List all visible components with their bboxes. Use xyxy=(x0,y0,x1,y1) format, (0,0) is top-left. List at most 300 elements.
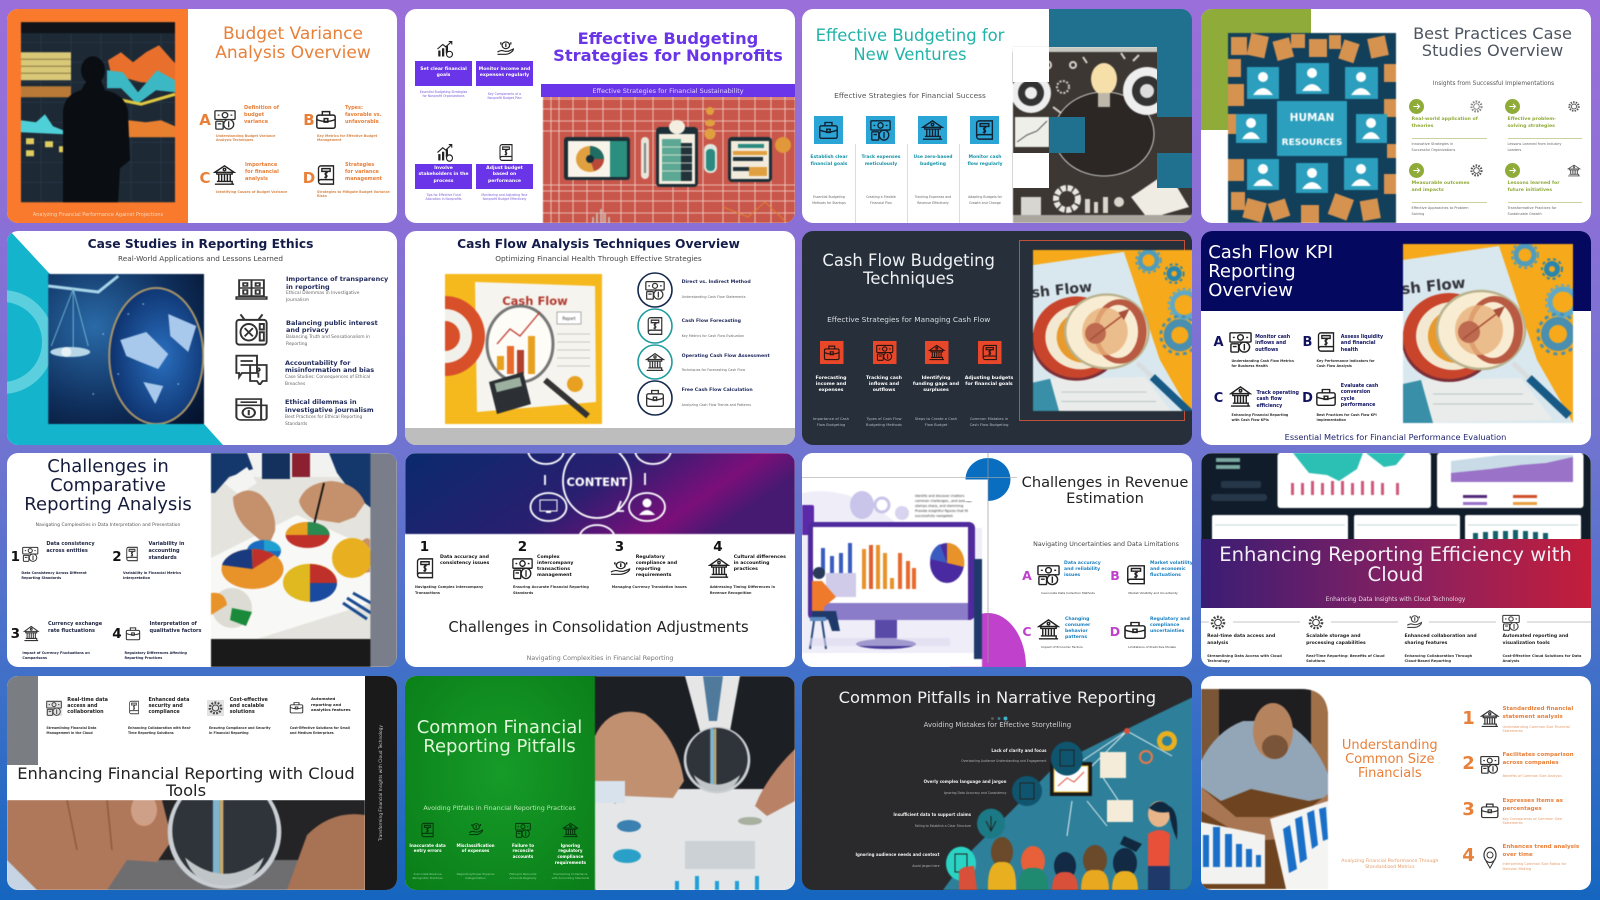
point: performance xyxy=(1341,403,1375,408)
note: Real-Time Reporting: Benefits of Cloud xyxy=(1306,654,1385,658)
white notch xyxy=(1013,152,1049,188)
label xyxy=(486,166,523,184)
point C: analysis xyxy=(245,176,268,182)
label: surpluses xyxy=(923,388,949,393)
icon: briefcase xyxy=(1314,387,1336,407)
arrow badge xyxy=(1505,98,1520,114)
image: cash flow report with magnifier xyxy=(445,274,602,424)
note: Key Components of a xyxy=(488,92,521,96)
number 1: 1 xyxy=(1462,708,1475,729)
note: Standards xyxy=(513,591,533,595)
title xyxy=(1413,25,1572,59)
point xyxy=(1502,751,1574,767)
image: human resources blocks xyxy=(1228,32,1396,222)
point xyxy=(286,320,378,335)
point: efficiency xyxy=(1256,404,1282,409)
banner image: content cycle: CONTENT xyxy=(566,475,628,489)
note: Enhancing Collaboration Through xyxy=(1404,654,1472,658)
box: goals xyxy=(415,60,472,86)
note xyxy=(1306,654,1385,663)
label: requirements xyxy=(555,860,586,865)
point: across entities xyxy=(46,548,88,554)
point xyxy=(734,555,786,573)
label: expenses regularly xyxy=(480,73,529,78)
point xyxy=(148,541,184,562)
point C: for financial xyxy=(245,168,279,174)
note D xyxy=(317,190,390,198)
note: Data Consistency Across Different xyxy=(21,570,87,574)
number 4: 4 xyxy=(713,539,723,555)
label: inflows and xyxy=(869,382,899,387)
icon: bank xyxy=(1228,385,1252,408)
icon: ledger xyxy=(318,165,334,185)
icon: chart grid xyxy=(46,700,62,716)
note xyxy=(1207,654,1282,663)
note: Streamlining Financial Data xyxy=(46,726,96,730)
point: reporting xyxy=(636,567,661,572)
note: Key Performance Indicators for xyxy=(1316,358,1375,362)
note: Effective Approaches to Problem xyxy=(1412,206,1469,210)
note xyxy=(22,650,90,660)
point: Regulatory xyxy=(636,555,665,560)
point: compliance xyxy=(1150,623,1179,628)
note xyxy=(1502,654,1581,663)
icon: laptop xyxy=(235,278,268,302)
label xyxy=(1412,117,1478,131)
note: Key Metrics for Cash Flow Evaluation xyxy=(682,334,744,338)
label: meticulously xyxy=(865,162,897,167)
note xyxy=(124,650,187,660)
panel: Common Pitfalls in Narrative Reporting xyxy=(802,676,1192,890)
panel: Cash Flow Budgeting Techniques xyxy=(802,231,1192,445)
point xyxy=(1150,561,1193,579)
point: Importance of transparency xyxy=(286,275,388,283)
panel: Challenges in Consolidation Adjustments xyxy=(405,453,795,667)
point: Real-time data access and xyxy=(1207,634,1275,639)
note xyxy=(866,416,902,428)
point: analytics features xyxy=(311,707,351,712)
subtitle: Effective Strategies for Financial Sustainability xyxy=(592,86,744,94)
icon tile: ledger xyxy=(970,116,999,144)
icon: chess pieces xyxy=(1566,164,1580,176)
label: process xyxy=(433,179,454,184)
note: Benefits of Common Size Analysis xyxy=(1502,774,1562,778)
icon: growth xyxy=(437,41,454,58)
note B: Management xyxy=(317,138,341,142)
icon: bank xyxy=(22,625,39,642)
point: Assess liquidity xyxy=(1341,335,1383,340)
point: Accountability for xyxy=(285,359,350,367)
icon: cash xyxy=(1228,331,1252,353)
rule xyxy=(1412,202,1582,203)
ring icon: ledger xyxy=(636,308,672,344)
note xyxy=(286,290,359,304)
ring icon: cash xyxy=(636,272,672,308)
title xyxy=(1208,243,1333,300)
note xyxy=(552,872,589,880)
label: Set clear financial xyxy=(420,67,467,72)
image: scales and globe xyxy=(48,274,204,424)
label xyxy=(1508,181,1560,195)
point: Standardized financial xyxy=(1502,706,1573,712)
box: adjust xyxy=(476,164,533,189)
point D: for variance xyxy=(345,168,379,174)
point: intercompany xyxy=(537,561,573,566)
note: Standards xyxy=(285,422,307,426)
icon: briefcase xyxy=(289,701,304,714)
title: Challenges in xyxy=(47,456,169,477)
point: access and xyxy=(67,703,98,709)
note: Avoid jargon here xyxy=(912,864,940,868)
note xyxy=(813,416,849,428)
note xyxy=(1232,412,1288,422)
point: Direct vs. Indirect Method xyxy=(682,280,751,285)
icon tile: ledger xyxy=(978,341,1001,364)
image: human resources blocks: RESOURCES xyxy=(1281,138,1342,148)
label: Forecasting xyxy=(816,376,846,380)
point: uncertainties xyxy=(1150,629,1184,634)
label xyxy=(1508,117,1556,131)
note: Neglecting Proper Expense xyxy=(457,872,494,876)
letter B: B xyxy=(1110,568,1120,583)
point: security and xyxy=(148,703,183,709)
point xyxy=(1065,617,1090,641)
label xyxy=(479,66,530,78)
teal block lower right xyxy=(1157,152,1193,188)
point xyxy=(285,399,374,414)
point: Enhanced collaboration and xyxy=(1404,634,1477,639)
point: in reporting xyxy=(286,283,330,291)
note xyxy=(1502,725,1570,734)
icon: briefcase xyxy=(1123,620,1147,640)
icon: delivery xyxy=(1404,614,1422,631)
note xyxy=(970,416,1008,428)
image: analytics dashboard xyxy=(1200,453,1590,540)
title xyxy=(215,24,371,62)
note D: Strategies to Mitigate Budget Variance xyxy=(317,190,390,194)
title xyxy=(24,458,192,514)
subtitle: Real-World Applications and Lessons Learned xyxy=(118,254,283,262)
subtitle: Enhancing Data Insights with Cloud Technology xyxy=(1326,597,1465,603)
point: Free Cash Flow Calculation xyxy=(682,388,753,393)
label: Use zero-based xyxy=(913,155,953,160)
connector lines xyxy=(1200,621,1590,623)
note xyxy=(21,570,87,580)
note: Statements xyxy=(1502,729,1523,733)
note: Allocation in Nonprofits xyxy=(425,197,462,201)
point: consumer xyxy=(1065,623,1090,628)
subtitle: Optimizing Financial Health Through Effective Strategies xyxy=(495,254,702,262)
title: Cloud xyxy=(1368,563,1423,586)
number 4: 4 xyxy=(1462,845,1475,866)
white notch xyxy=(1013,46,1049,82)
note xyxy=(481,192,528,201)
title: Budget Variance xyxy=(223,24,363,44)
note: Flow Budget xyxy=(925,423,947,427)
note xyxy=(1412,141,1455,153)
label: regulatory xyxy=(558,848,583,853)
note: Decision Making xyxy=(1502,867,1531,871)
title xyxy=(417,719,582,756)
image: hands over pie charts xyxy=(211,453,397,667)
icon: ledger xyxy=(128,700,140,715)
magenta circle xyxy=(950,613,1030,667)
point: patterns xyxy=(1065,635,1087,640)
icon: map pin coin xyxy=(1482,847,1496,869)
note A: Analysis Techniques xyxy=(216,138,253,142)
point: requirements xyxy=(636,573,671,578)
point: fluctuations xyxy=(1150,573,1181,578)
note: Market Volatility and Uncertainty xyxy=(1128,591,1178,595)
box: stakeholders xyxy=(415,164,472,189)
note: and Medium Enterprises xyxy=(290,731,334,735)
icon tile: cash xyxy=(866,116,895,144)
title: Reporting Pitfalls xyxy=(423,736,576,757)
point: Monitor cash xyxy=(1255,335,1290,340)
label xyxy=(913,154,953,167)
note: Navigating Complex Intercompany xyxy=(415,585,483,589)
point: issues xyxy=(1064,573,1080,578)
label: income and xyxy=(816,382,846,387)
label xyxy=(418,166,469,184)
point: misinformation and bias xyxy=(285,366,374,374)
illustration: teal network and audience xyxy=(802,676,1193,890)
title: Effective Budgeting xyxy=(578,29,758,48)
point: in accounting xyxy=(734,561,769,566)
subtitle xyxy=(1341,859,1438,871)
title: Estimation xyxy=(1066,490,1144,507)
note xyxy=(866,194,896,204)
point: Track operating xyxy=(1256,391,1299,396)
subtitle band xyxy=(541,84,795,97)
panel: Challenges in Comparative Reporting Analysis xyxy=(7,453,397,667)
note: Overlooking Compliance xyxy=(553,872,588,876)
note: for Nonprofit Organizations xyxy=(422,94,464,98)
label: accounts xyxy=(513,854,533,859)
letter D: D xyxy=(1302,391,1313,406)
note xyxy=(285,374,370,388)
note B: Key Metrics for Effective Budget xyxy=(317,134,377,138)
note: Interpretation xyxy=(123,576,150,580)
note xyxy=(285,414,362,428)
note xyxy=(123,570,181,580)
point xyxy=(48,621,102,635)
note: Budgeting Methods xyxy=(866,423,902,427)
note B xyxy=(317,134,378,142)
note: Reporting Standards xyxy=(21,576,61,580)
note: Statements xyxy=(1502,821,1523,825)
icon: chip xyxy=(1208,614,1226,631)
point: Complex xyxy=(537,555,560,560)
icon tile: briefcase xyxy=(820,341,844,364)
note: Creating a Flexible xyxy=(866,194,896,198)
note xyxy=(513,585,589,596)
label: financial goals xyxy=(811,162,847,167)
label: Adjust budget xyxy=(486,166,523,171)
point D: Strategies xyxy=(345,162,374,168)
point xyxy=(1207,634,1275,647)
title xyxy=(553,29,783,65)
note: Sustainable Growth xyxy=(1508,212,1542,216)
point: Enhanced data xyxy=(148,697,189,703)
note: Categorization xyxy=(465,876,486,880)
point: Insufficient data to support claims xyxy=(893,812,971,817)
title: Case Studies in Reporting Ethics xyxy=(88,237,313,251)
note A xyxy=(216,134,276,142)
icon: coin in hand xyxy=(497,41,514,55)
illustration: analysts at monitor: Identify and discover chatters xyxy=(915,494,964,498)
icon: cash xyxy=(1480,755,1499,774)
label: compliance xyxy=(557,854,583,859)
note: Solving xyxy=(1412,212,1424,216)
note: Financial Plan xyxy=(870,200,892,204)
point: Cultural differences xyxy=(734,555,786,560)
green block xyxy=(1200,8,1310,130)
label: Tracking cash xyxy=(866,376,902,380)
point: Data consistency xyxy=(46,541,95,547)
point: and privacy xyxy=(286,326,329,334)
note xyxy=(1232,358,1294,368)
icon: briefcase xyxy=(316,110,336,129)
note: Lessons Learned from Industry xyxy=(1508,142,1561,146)
footer line: Essential Metrics for Financial Performance Evaluation xyxy=(1285,432,1506,442)
navy header xyxy=(1200,231,1590,311)
icon: umbrella coins xyxy=(562,822,579,838)
note: Recognition Practices xyxy=(413,876,443,880)
point: accounting xyxy=(148,548,180,554)
ring icon: bank xyxy=(636,344,672,380)
dark side column xyxy=(365,676,397,890)
note: Ensuring Compliance and Security xyxy=(209,726,271,730)
panel: Understanding Common Size Financials xyxy=(1200,676,1590,890)
letter B: B xyxy=(303,110,315,128)
note: Case Studies: Consequences of Ethical xyxy=(285,374,370,380)
letter D: D xyxy=(303,168,315,186)
note: Management in the Cloud xyxy=(46,731,93,735)
image: inspecting documents with magnifier xyxy=(595,676,795,890)
ring icon: briefcase xyxy=(636,380,672,416)
icon: speech bubbles xyxy=(235,353,268,385)
title xyxy=(1219,544,1572,586)
arrow badge xyxy=(1505,162,1520,178)
icon: cash xyxy=(512,557,533,579)
note: with Cash Flow KPIs xyxy=(1232,418,1269,422)
number 2: 2 xyxy=(518,539,527,555)
note xyxy=(457,872,494,880)
note: Managing Currency Translation Issues xyxy=(612,585,687,589)
point: investigative journalism xyxy=(285,406,374,414)
note: Enhancing Financial Reporting xyxy=(1232,412,1288,416)
title: Challenges in Revenue xyxy=(1022,474,1188,491)
point: Ignoring audience needs and context xyxy=(855,852,940,857)
image: man reviewing printed charts xyxy=(1201,688,1329,890)
icon: ledger xyxy=(1125,564,1147,586)
point: Automated xyxy=(311,696,335,701)
arrow badge xyxy=(1408,98,1424,114)
note: Steps to Create a Cash xyxy=(915,417,957,421)
title: Challenges in Consolidation Adjustments xyxy=(448,619,749,636)
note: Techniques for Forecasting Cash Flow xyxy=(682,368,745,372)
point: Balancing public interest xyxy=(286,319,378,327)
icon: growth xyxy=(437,144,454,162)
image: target under magnifier xyxy=(1032,250,1194,411)
title: Strategies for Nonprofits xyxy=(553,46,783,65)
note xyxy=(510,872,536,880)
note xyxy=(487,92,522,100)
point: sharing features xyxy=(1404,640,1447,646)
letter A: A xyxy=(1213,335,1224,350)
point xyxy=(1150,617,1190,635)
teal block centre xyxy=(1049,116,1085,152)
letter C: C xyxy=(1214,391,1223,406)
image: analyst viewing financial charts xyxy=(20,21,176,204)
panel: Cash Flow KPI Reporting Overview xyxy=(1200,231,1590,445)
label: Failure to xyxy=(512,843,534,848)
point xyxy=(1064,561,1101,579)
image: red grid with finance devices xyxy=(542,97,795,223)
panel: Common Financial Reporting Pitfalls xyxy=(405,676,795,890)
label xyxy=(967,154,1003,167)
note: Leaders xyxy=(1508,148,1521,152)
teal block top xyxy=(1049,8,1193,46)
icon tile: bank xyxy=(918,116,947,144)
image: light bulb and icons xyxy=(1012,46,1192,223)
point A xyxy=(244,105,279,125)
label: expenses xyxy=(819,388,843,393)
icon tile: briefcase xyxy=(814,116,843,144)
point xyxy=(1256,391,1299,410)
label: Ignoring xyxy=(561,843,580,848)
point: Expresses Items as xyxy=(1502,798,1563,804)
note: Cash Flow Analysis xyxy=(1316,364,1352,368)
note xyxy=(1508,204,1556,217)
note: Understanding Common Size Financial xyxy=(1502,725,1570,729)
letter A: A xyxy=(1022,568,1032,583)
subtitle: Analyzing Financial Performance Through xyxy=(1341,859,1438,864)
label: Measurable outcomes xyxy=(1412,181,1470,186)
title xyxy=(816,26,1004,64)
blue circle xyxy=(965,458,1011,501)
label xyxy=(512,843,534,860)
note: Streamlining Data Access with Cloud xyxy=(1207,654,1282,658)
image: human resources blocks: HUMAN xyxy=(1289,112,1334,124)
icon: cloud network xyxy=(1306,614,1324,631)
illustration: analysts at monitor: common challenges...and average xyxy=(915,499,972,503)
icon: chart grid xyxy=(1502,614,1520,631)
point: Market volatility xyxy=(1150,561,1192,566)
point: Automated reporting and xyxy=(1502,634,1568,639)
point: management xyxy=(537,573,572,578)
point: cash flow xyxy=(1256,397,1282,402)
point xyxy=(537,555,573,579)
point: Lack of clarity and focus xyxy=(991,748,1046,753)
icon tile: bank xyxy=(925,341,948,364)
note xyxy=(1412,204,1469,217)
icon: cash xyxy=(1037,564,1060,586)
title: Cash Flow KPI xyxy=(1208,242,1333,263)
note xyxy=(1502,817,1562,825)
label: and impacts xyxy=(1412,188,1444,193)
image: hand with magnifying lens xyxy=(7,800,365,890)
label: theories xyxy=(1412,124,1433,129)
letter D: D xyxy=(1110,624,1120,639)
title: Common Pitfalls in Narrative Reporting xyxy=(839,688,1156,707)
subtitle: Standardized Metrics xyxy=(1365,865,1415,870)
point: Evaluate cash xyxy=(1341,384,1378,389)
orange side panel xyxy=(7,8,188,222)
point xyxy=(67,697,108,716)
icon: television xyxy=(235,313,268,346)
